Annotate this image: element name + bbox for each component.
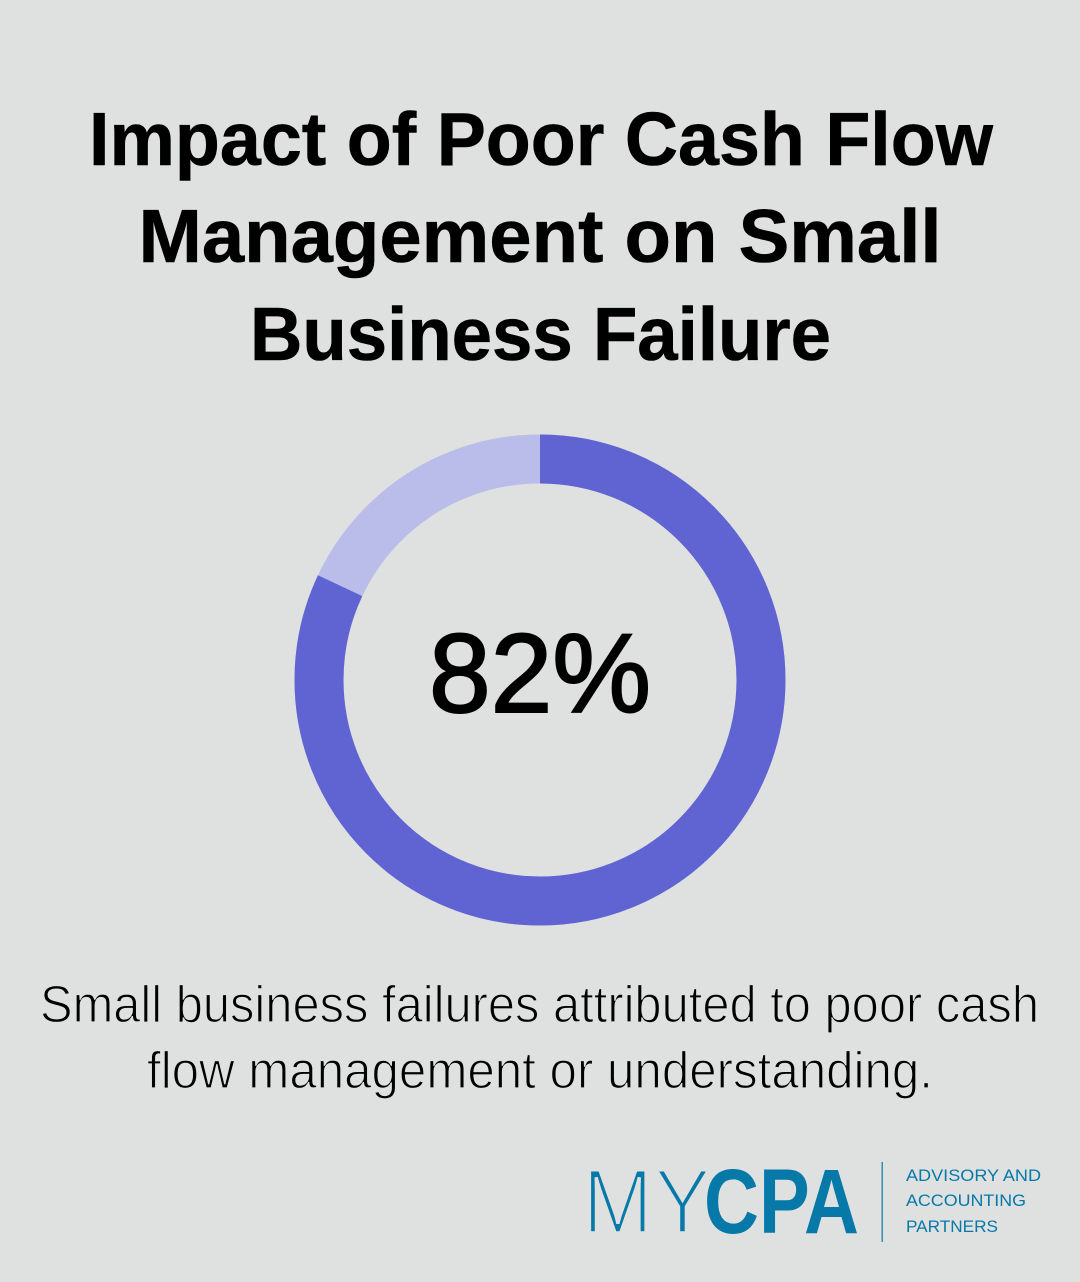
logo wordmark CPA: CPA (704, 1151, 859, 1253)
logo tagline (906, 1166, 1041, 1236)
title: Business Failure (250, 292, 831, 376)
logo: MYCPA advisory and accounting partners (582, 1150, 1041, 1253)
description text: flow management or understanding. (147, 1042, 933, 1100)
logo tagline: PARTNERS (906, 1217, 998, 1236)
description text: Small business failures attributed to poor cash (40, 976, 1039, 1034)
logo tagline: ADVISORY AND (906, 1166, 1041, 1185)
percentage value: 82% (429, 611, 651, 736)
donut chart: 82% (319, 459, 761, 901)
logo tagline: ACCOUNTING (906, 1191, 1026, 1210)
title: Impact of Poor Cash Flow (89, 97, 994, 181)
title: Management on Small (138, 194, 942, 278)
description text (40, 976, 1039, 1100)
logo wordmark MY: MY (582, 1150, 711, 1253)
title (89, 97, 994, 376)
